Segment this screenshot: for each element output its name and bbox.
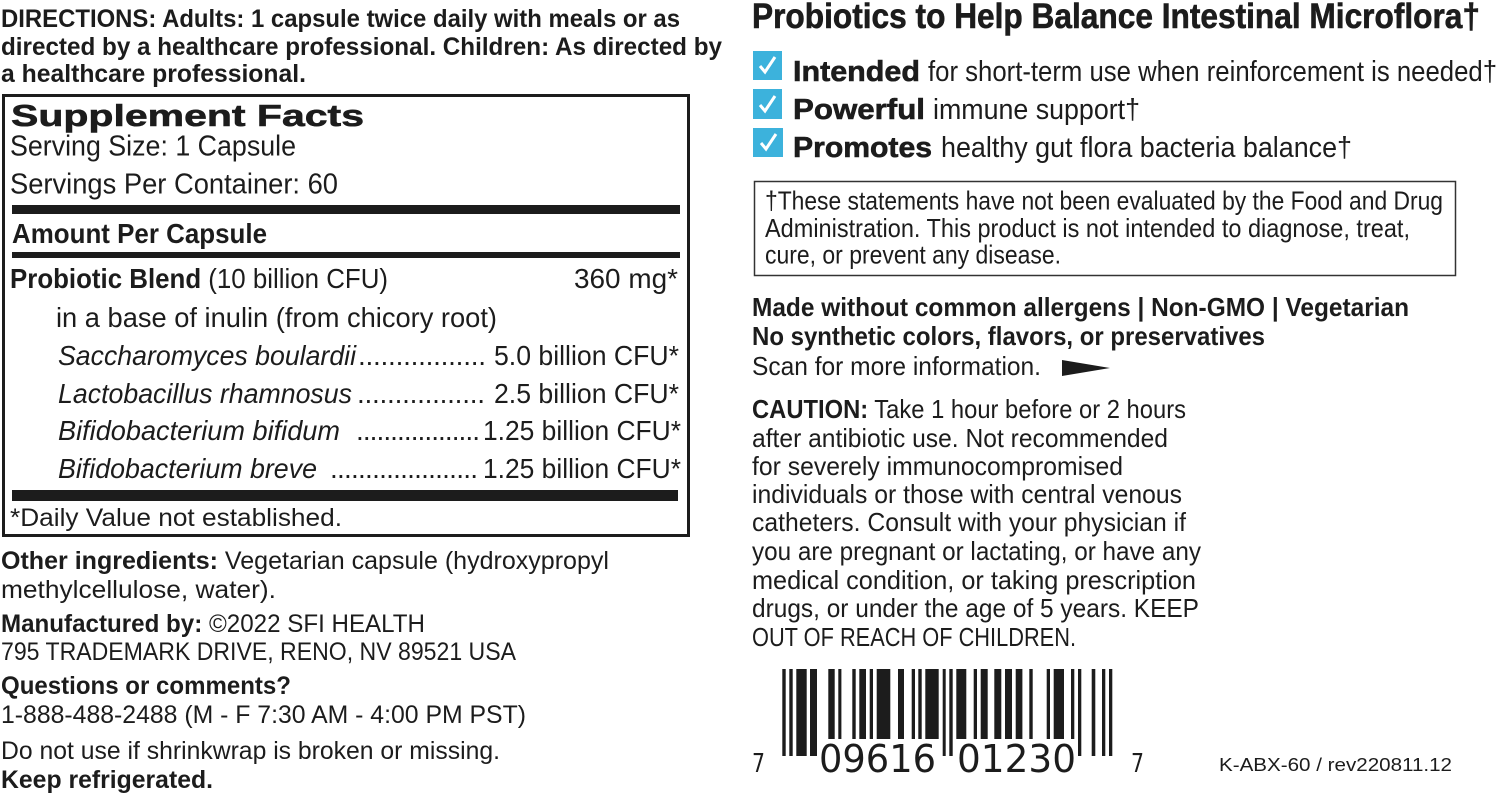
directions text block: a healthcare professional. (1, 60, 306, 88)
ingredient: bifidobacterium breve (58, 453, 681, 484)
ingredient: bifidobacterium bifidum: 1.25 billion CFU* (483, 415, 681, 446)
storage note: Do not use if shrinkwrap is broken or missing. (1, 737, 500, 765)
panel: supplement facts (4, 96, 688, 536)
benefit: intended: Intended (793, 56, 920, 88)
allergen claims: No synthetic colors, flavors, or preservatives (752, 321, 1265, 351)
barcode (752, 669, 1144, 781)
icon: check box (753, 128, 783, 157)
manufacturer: 795 TRADEMARK DRIVE, RENO, NV 89521 USA (1, 638, 516, 666)
benefit: powerful: immune support† (933, 94, 1140, 126)
serving size: Serving Size: 1 Capsule (10, 130, 296, 162)
other ingredients: methylcellulose, water). (1, 576, 276, 604)
icon: check box (753, 89, 782, 119)
ingredient: bifidobacterium breve: ..................... (330, 453, 478, 484)
probiotic blend row: 360 mg* (574, 263, 678, 294)
scan prompt: Scan for more information. (752, 351, 1041, 381)
ingredient: saccharomyces boulardii: ................. (358, 340, 486, 371)
ingredient: lactobacillus rhamnosus: ................. (357, 378, 485, 409)
ingredient: bifidobacterium breve: 1.25 billion CFU* (483, 453, 681, 484)
caution text block: catheters. Consult with your physician if (752, 507, 1187, 537)
ingredient: saccharomyces boulardii: Saccharomyces boulardii (58, 340, 357, 371)
arrow (1062, 360, 1110, 376)
benefit: powerful: Powerful (793, 94, 925, 126)
icon: check box (753, 51, 782, 80)
other ingredients (1, 547, 609, 604)
fda disclaimer box: Administration. This product is not intended to diagnose, treat, (765, 213, 1410, 243)
barcode: 7 (1131, 749, 1144, 779)
barcode: 7 (752, 749, 765, 779)
caution text block (752, 394, 1201, 652)
directions text block: DIRECTIONS: Adults: 1 capsule twice daily with meals or as (1, 5, 680, 33)
manufacturer (1, 610, 516, 666)
allergen claims: Made without common allergens | Non-GMO | Vegetarian (752, 292, 1409, 322)
fda disclaimer box: cure, or prevent any disease. (765, 240, 1061, 270)
directions text block (1, 5, 722, 88)
contact: 1-888-488-2488 (M - F 7:30 AM - 4:00 PM PST) (1, 701, 526, 729)
caution text block: medical condition, or taking prescription (752, 565, 1196, 595)
storage note: Keep refrigerated. (1, 766, 213, 794)
benefit: promotes (753, 128, 1352, 164)
servings per container: Servings Per Container: 60 (10, 168, 338, 200)
caution text block: OUT OF REACH OF CHILDREN. (752, 622, 1076, 652)
ingredient: bifidobacterium bifidum (58, 415, 681, 446)
other ingredients: Other ingredients: Vegetarian capsule (hydroxypropyl (1, 547, 609, 575)
contact: Questions or comments? (1, 672, 291, 700)
barcode: 01230 (957, 737, 1076, 781)
caution text block: individuals or those with central venous (752, 479, 1182, 509)
ingredient: saccharomyces boulardii (58, 340, 679, 371)
ingredient: lactobacillus rhamnosus: 2.5 billion CFU* (494, 378, 679, 409)
benefit: powerful (753, 89, 1140, 126)
ingredient: saccharomyces boulardii: 5.0 billion CFU* (494, 340, 679, 371)
inulin base: in a base of inulin (from chicory root) (56, 302, 497, 333)
benefit: promotes: healthy gut flora bacteria balance† (941, 132, 1352, 164)
caution text block: after antibiotic use. Not recommended (752, 423, 1168, 453)
product code: K-ABX-60 / rev220811.12 (1219, 755, 1452, 775)
caution text block: drugs, or under the age of 5 years. KEEP (752, 593, 1199, 623)
ingredient: bifidobacterium bifidum: Bifidobacterium bifidum (58, 415, 340, 446)
caution text block: for severely immunocompromised (752, 451, 1123, 481)
allergen claims (752, 292, 1409, 351)
contact (1, 672, 526, 729)
amount per capsule: Amount Per Capsule (12, 218, 267, 249)
ingredient: bifidobacterium bifidum: .................. (356, 415, 480, 446)
caution text block: CAUTION: Take 1 hour before or 2 hours (752, 394, 1186, 424)
benefit: intended (753, 51, 1497, 88)
ingredient: lactobacillus rhamnosus: Lactobacillus rhamnosus (58, 378, 352, 409)
ingredient: lactobacillus rhamnosus (58, 378, 679, 409)
directions text block: directed by a healthcare professional. Children: As directed by (1, 33, 722, 61)
heading: supplement facts: Supplement Facts (11, 98, 364, 133)
barcode: 09616 (819, 737, 936, 781)
daily value footnote: *Daily Value not established. (10, 504, 342, 532)
ingredient: bifidobacterium breve: Bifidobacterium breve (58, 453, 317, 484)
caution text block: you are pregnant or lactating, or have any (752, 536, 1201, 566)
manufacturer: Manufactured by: ©2022 SFI HEALTH (1, 610, 425, 638)
probiotic blend row: Probiotic Blend (10 billion CFU) (10, 263, 388, 294)
benefit: promotes: Promotes (793, 132, 932, 164)
probiotic blend row (10, 263, 678, 294)
storage note (1, 737, 500, 794)
fda disclaimer box (754, 182, 1456, 276)
